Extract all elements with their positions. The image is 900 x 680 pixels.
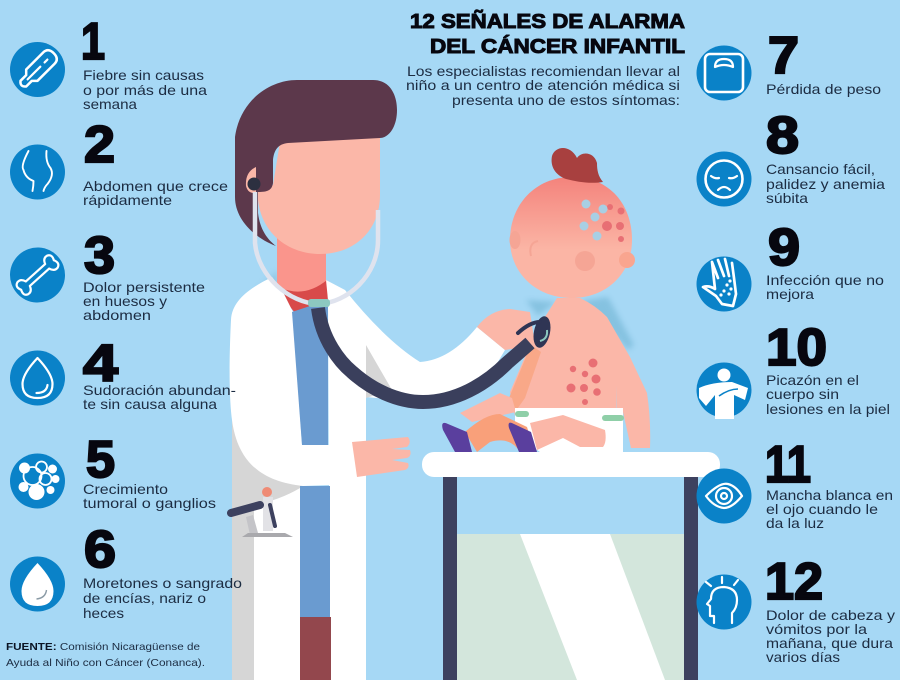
item 8 (696, 107, 885, 206)
item 11 (696, 436, 893, 531)
neck (277, 235, 326, 300)
item 11: 11 (765, 436, 811, 494)
item 5 (10, 431, 216, 511)
item 6: de encías, nariz o (83, 590, 206, 606)
stethoscope ear tubes (255, 192, 378, 304)
item 2 (10, 116, 228, 208)
ear (246, 167, 256, 193)
item 2: rápidamente (83, 192, 172, 208)
icon: bone (0, 236, 76, 314)
item 12: mañana, que dura (766, 635, 893, 651)
baby hair (552, 148, 603, 183)
item 1 (10, 13, 207, 112)
illustration: doctor (230, 80, 553, 680)
item 9: mejora (766, 286, 814, 302)
item 1: o por más de una (83, 82, 207, 98)
item 8: 8 (766, 107, 799, 165)
item 11: da la luz (766, 515, 824, 531)
icon: blood drop (10, 556, 65, 612)
intro text (406, 63, 680, 108)
item 12: vómitos por la (766, 621, 867, 637)
rash on torso (566, 358, 601, 405)
item 7 (696, 27, 881, 100)
icon: scale (696, 46, 752, 100)
stethoscope junction (308, 299, 330, 307)
item 7: 7 (768, 27, 799, 85)
baby body (510, 298, 650, 448)
item 6: 6 (84, 521, 116, 579)
item 9: 9 (768, 219, 800, 277)
item 4: Sudoración abundan- (83, 382, 236, 398)
source note: FUENTE: Comisión Nicaragüense de (6, 641, 200, 653)
item 12 (696, 553, 895, 665)
title: DEL CÁNCER INFANTIL (430, 35, 685, 58)
item 1: Fiebre sin causas (83, 67, 204, 83)
item 1: 1 (81, 13, 105, 71)
item 10: 10 (766, 319, 827, 377)
item 2: Abdomen que crece (83, 178, 228, 194)
icon: eye (696, 468, 752, 524)
item 3 (0, 227, 205, 323)
baby ear and cheeks (510, 231, 635, 271)
baby forearm under tube (460, 393, 516, 422)
intro text: Los especialistas recomiendan llevar al (407, 63, 680, 79)
item 5: Crecimiento (83, 481, 168, 497)
icon: thermometer (10, 42, 65, 97)
item 12: Dolor de cabeza y (766, 607, 895, 623)
baby feet (442, 423, 537, 452)
collar (281, 280, 328, 313)
illustration: baby (442, 148, 650, 452)
table top (422, 452, 720, 477)
baby skin shadow (526, 297, 634, 350)
pocket with instruments (231, 487, 293, 537)
title: 12 SEÑALES DE ALARMA (410, 10, 685, 33)
item 10: lesiones en la piel (766, 401, 890, 417)
icon: sweat drop (10, 350, 65, 406)
item 6: Moretones o sangrado (83, 575, 242, 591)
item 7: Pérdida de peso (766, 81, 881, 97)
tie (292, 300, 331, 680)
item 1: semana (83, 96, 137, 112)
lab coat (230, 277, 357, 486)
source note: Ayuda al Niño con Cáncer (Conanca). (6, 657, 205, 669)
item 10 (696, 319, 890, 419)
title (410, 10, 685, 58)
item 8: Cansancio fácil, (766, 161, 875, 177)
doctor hand on baby (477, 309, 535, 350)
face (258, 134, 380, 254)
earpiece (248, 178, 260, 190)
item 10: Picazón en el (766, 372, 859, 388)
item 3: en huesos y (83, 293, 167, 309)
intro text: presenta uno de estos síntomas: (452, 92, 680, 108)
stethoscope head (518, 315, 553, 349)
item 9: Infección que no (766, 272, 884, 288)
intro text: niño a un centro de atención médica si (406, 77, 680, 93)
icon: tumor cells (10, 454, 65, 508)
hair (235, 80, 397, 246)
lab coat shadow (232, 420, 302, 680)
item 4: te sin causa alguna (83, 396, 217, 412)
item 8: palidez y anemia (766, 176, 885, 192)
item 5: tumoral o ganglios (83, 495, 216, 511)
rash on head (580, 200, 624, 242)
item 4: 4 (83, 335, 118, 393)
icon: infected hand (696, 256, 752, 312)
item 3: 3 (84, 227, 115, 285)
item 4 (10, 335, 236, 412)
baby head (510, 177, 632, 298)
source note (6, 641, 205, 669)
doctor lower hand (352, 437, 411, 477)
icon: abdomen (10, 144, 65, 200)
item 3: abdomen (83, 307, 151, 323)
item 8: súbita (766, 190, 808, 206)
item 12: 12 (765, 553, 823, 611)
item 2: 2 (84, 116, 115, 174)
icon: itching body (696, 362, 752, 419)
coat fold (366, 345, 392, 398)
neck shadow (255, 270, 278, 292)
item 9 (696, 219, 884, 312)
baby arm behind (509, 345, 541, 412)
item 6: heces (83, 605, 124, 621)
stethoscope tube (318, 308, 530, 402)
item 5: 5 (86, 431, 115, 489)
item 12: varios días (766, 649, 840, 665)
item 6 (10, 521, 242, 621)
exam table (443, 470, 698, 680)
diaper (515, 408, 623, 452)
item 11: Mancha blanca en (766, 487, 893, 503)
item 10: cuerpo sin (766, 386, 839, 402)
icon: tired face (696, 152, 752, 206)
item 3: Dolor persistente (83, 279, 205, 295)
icon: headache (696, 574, 752, 630)
baby legs (465, 414, 535, 452)
item 11: el ojo cuando le (766, 501, 878, 517)
